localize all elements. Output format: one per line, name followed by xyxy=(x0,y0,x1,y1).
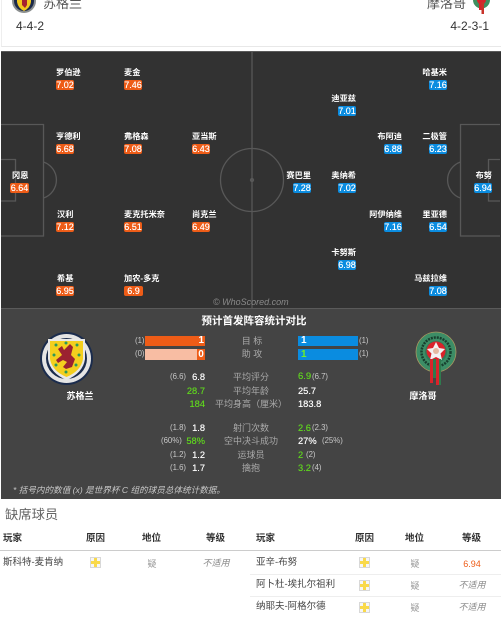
footnote: * 括号内的数值 (x) 是世界杯 C 组的球员总体统计数据。 xyxy=(13,485,225,495)
player: 里亚德 xyxy=(422,210,447,232)
row: dribbles: 2 xyxy=(298,450,303,460)
icon: Scotland crest top xyxy=(12,0,36,13)
player row: 亚辛-布努: 亚辛-布努 xyxy=(256,557,297,568)
players: Morocco xyxy=(286,68,492,296)
stat table: performance xyxy=(161,423,343,473)
row: dribbles: (1.2) xyxy=(170,450,186,459)
player: 阿伊纳维: 阿伊纳维 xyxy=(369,210,402,219)
pitch lines xyxy=(1,52,500,308)
player: 弗格森 xyxy=(124,132,149,154)
player: 奥纳希: 7.02 xyxy=(338,183,356,193)
player: 赛巴里: 赛巴里 xyxy=(286,171,311,180)
formation: Morocco: 4-2-3-1 xyxy=(450,19,489,33)
stat: goals: 1 xyxy=(198,335,204,346)
row: tackles: 1.7 xyxy=(192,463,205,473)
player: 汉利: 汉利 xyxy=(57,210,73,219)
stat: goals: (1) xyxy=(135,336,145,345)
row: tackles: 3.2 xyxy=(298,463,311,473)
row: tackles: 擒抱 xyxy=(242,463,260,473)
player: 布阿迪: 布阿迪 xyxy=(377,132,402,141)
header panel xyxy=(1,0,501,47)
player: 阿伊纳维: 7.16 xyxy=(384,222,402,232)
player: 亚当斯: 6.43 xyxy=(192,144,210,154)
player: 卡努斯: 6.98 xyxy=(338,260,356,270)
stats panel xyxy=(1,308,501,499)
player: 麦金: 麦金 xyxy=(124,68,140,77)
player: 奥纳希: 奥纳希 xyxy=(331,171,356,180)
row: aerial duels: 58% xyxy=(186,436,205,446)
player: 冈恩: 冈恩 xyxy=(12,171,28,180)
player: 迪亚兹: 7.01 xyxy=(338,106,356,116)
player: 二极管: 二极管 xyxy=(422,132,447,141)
header row: 地位 xyxy=(142,533,161,544)
row: average rating xyxy=(170,371,328,382)
row: average rating: (6.6) xyxy=(170,372,186,381)
player: 汉利 xyxy=(56,210,74,232)
player row: 阿卜杜-埃扎尔祖利: 阿卜杜-埃扎尔祖利 xyxy=(256,579,335,590)
row: tackles xyxy=(170,463,322,473)
team label: Scotland: 苏格兰 xyxy=(66,391,94,401)
player: 卡努斯: 卡努斯 xyxy=(331,248,356,257)
row: aerial duels: (25%) xyxy=(322,436,343,445)
stats title: 预计首发阵容统计对比 xyxy=(202,315,306,327)
player: 亚当斯: 亚当斯 xyxy=(192,132,217,141)
player row: 斯科特-麦肯纳: 斯科特-麦肯纳 xyxy=(3,557,63,568)
player: 弗格森: 7.08 xyxy=(124,144,142,154)
row: aerial duels: 空中决斗成功 xyxy=(224,436,278,446)
row: average height: 平均身高（厘米） xyxy=(215,399,287,409)
player: 布努 xyxy=(474,171,492,193)
row: dribbles xyxy=(170,450,316,460)
row: average rating: 平均评分 xyxy=(233,372,269,382)
player: 尚克兰 xyxy=(192,210,217,232)
player row: 亚辛-布努: 6.94 xyxy=(463,559,481,569)
header row: 地位 xyxy=(405,533,424,544)
row: tackles: (4) xyxy=(312,463,322,472)
row: average height: 184 xyxy=(189,399,205,409)
stat: goals: (1) xyxy=(359,336,369,345)
player row: 纳耶夫-阿格尔德: 不适用 xyxy=(458,602,486,612)
row: aerial duels xyxy=(161,436,343,446)
row: dribbles: 运球员 xyxy=(237,450,264,460)
stat: assists: (1) xyxy=(359,349,369,358)
player: 尚克兰: 6.49 xyxy=(192,222,210,232)
stat: assists: 0 xyxy=(198,349,204,360)
player row: 阿卜杜-埃扎尔祖利 xyxy=(250,579,501,597)
stat: assists: (0) xyxy=(135,349,145,358)
team label: Morocco: 摩洛哥 xyxy=(409,391,436,401)
player row: 斯科特-麦肯纳 xyxy=(0,557,250,569)
table: Scotland missing players xyxy=(0,530,250,575)
icon: Scotland crest xyxy=(40,332,93,385)
header row: 玩家 xyxy=(3,533,22,544)
player: 麦金: 7.46 xyxy=(124,80,142,90)
player row: 纳耶夫-阿格尔德: 疑 xyxy=(410,603,420,613)
stat: assists: 1 xyxy=(301,349,307,360)
player: 麦克托米奈 xyxy=(124,210,165,232)
player: 布努: 布努 xyxy=(476,171,492,180)
header row xyxy=(0,530,250,551)
row: shots: (2.3) xyxy=(312,423,328,432)
player: 迪亚兹: 迪亚兹 xyxy=(331,94,356,103)
player: 赛巴里 xyxy=(286,170,311,193)
row: shots: 射门次数 xyxy=(233,423,269,433)
player: 冈恩 xyxy=(10,171,29,193)
row: shots: 1.8 xyxy=(192,423,205,433)
player row: 纳耶夫-阿格尔德: 纳耶夫-阿格尔德 xyxy=(256,601,326,612)
player: 希基: 6.95 xyxy=(56,286,74,296)
player: 布阿迪 xyxy=(377,132,402,154)
player row: 阿卜杜-埃扎尔祖利: 不适用 xyxy=(458,580,486,590)
player row: 斯科特-麦肯纳: 疑 xyxy=(147,559,156,569)
header row: 原因 xyxy=(355,533,374,544)
player: 阿伊纳维 xyxy=(369,210,402,232)
row: average age xyxy=(187,386,316,396)
player: 罗伯逊 xyxy=(56,68,81,90)
heading: missing players: 缺席球员 xyxy=(5,507,58,522)
player: 哈基米: 哈基米 xyxy=(422,68,447,77)
row: shots: (1.8) xyxy=(170,423,186,432)
row: average age: 平均年龄 xyxy=(233,386,269,396)
player: 加农-多克 xyxy=(124,274,160,296)
player row: 阿卜杜-埃扎尔祖利: 疑 xyxy=(410,581,420,591)
row: tackles: (1.6) xyxy=(170,463,186,472)
player: 亨德利: 6.68 xyxy=(56,144,74,154)
player: 冈恩: 6.64 xyxy=(11,183,28,193)
player: 尚克兰: 尚克兰 xyxy=(192,210,217,219)
row: average height: 183.8 xyxy=(298,399,321,409)
watermark: © WhoScored.com xyxy=(213,297,289,307)
player: 弗格森: 弗格森 xyxy=(124,132,149,141)
player: 麦克托米奈: 麦克托米奈 xyxy=(124,210,165,219)
player: 布阿迪: 6.88 xyxy=(384,144,402,154)
player: 希基: 希基 xyxy=(57,274,73,283)
player: 加农-多克: 加农-多克 xyxy=(124,274,159,283)
player: 亚当斯 xyxy=(192,132,217,154)
row: average rating: (6.7) xyxy=(312,372,328,381)
header row: 玩家 xyxy=(256,533,275,544)
stat: goals xyxy=(135,335,369,346)
player: 麦克托米奈: 6.51 xyxy=(124,222,142,232)
player: 加农-多克: 6.9 xyxy=(127,286,140,296)
row: dribbles: (2) xyxy=(306,450,316,459)
player: 奥纳希 xyxy=(331,171,356,193)
player: 迪亚兹 xyxy=(331,94,356,116)
player: 麦金 xyxy=(124,68,142,90)
player: 马兹拉维 xyxy=(414,274,447,296)
stat: goals: 目 标 xyxy=(242,336,262,346)
player: 马兹拉维: 7.08 xyxy=(429,286,447,296)
row: shots xyxy=(170,423,328,433)
player: 哈基米: 7.16 xyxy=(429,80,447,90)
player: 罗伯逊: 罗伯逊 xyxy=(56,68,81,77)
player: 希基 xyxy=(56,274,74,296)
row: average height xyxy=(189,399,321,409)
row: average age: 28.7 xyxy=(187,386,205,396)
player: 马兹拉维: 马兹拉维 xyxy=(414,274,447,283)
player row: 亚辛-布努: 疑 xyxy=(410,559,420,569)
player: 里亚德: 6.54 xyxy=(429,222,447,232)
row: dribbles: 1.2 xyxy=(192,450,205,460)
row: shots: 2.6 xyxy=(298,423,311,433)
header row: 原因 xyxy=(86,533,105,544)
table: Morocco missing players xyxy=(250,530,501,620)
player: 汉利: 7.12 xyxy=(56,222,74,232)
stat: assists: 助 攻 xyxy=(242,349,262,359)
row: aerial duels: 27% xyxy=(298,436,317,446)
stat: assists xyxy=(135,349,369,360)
header row: 等级 xyxy=(206,533,225,544)
icon: Morocco crest top xyxy=(473,0,490,14)
row: aerial duels: (60%) xyxy=(161,436,182,445)
row: average rating: 6.9 xyxy=(298,371,311,382)
stat: goals: 1 xyxy=(301,335,307,346)
player: 赛巴里: 7.28 xyxy=(293,183,311,193)
icon: Morocco crest xyxy=(416,332,456,385)
formation: Scotland: 4-4-2 xyxy=(16,19,44,33)
players: Scotland xyxy=(10,68,217,296)
player: 哈基米 xyxy=(422,68,447,90)
player: 里亚德: 里亚德 xyxy=(422,210,447,219)
player: 亨德利: 亨德利 xyxy=(56,132,81,141)
player: 卡努斯 xyxy=(331,248,356,270)
header row: 等级 xyxy=(462,533,481,544)
stat table: averages xyxy=(170,371,328,409)
header row xyxy=(250,530,501,551)
pitch panel xyxy=(1,51,501,308)
row: average rating: 6.8 xyxy=(192,372,205,382)
player: 二极管 xyxy=(422,132,447,154)
row: average age: 25.7 xyxy=(298,386,316,396)
player: 布努: 6.94 xyxy=(474,183,492,193)
player row: 斯科特-麦肯纳: 不适用 xyxy=(202,558,230,568)
player: 二极管: 6.23 xyxy=(429,144,447,154)
player row: 纳耶夫-阿格尔德 xyxy=(250,601,501,615)
player: 罗伯逊: 7.02 xyxy=(56,80,74,90)
player row: 亚辛-布努 xyxy=(250,557,501,575)
player: 亨德利 xyxy=(56,132,81,154)
